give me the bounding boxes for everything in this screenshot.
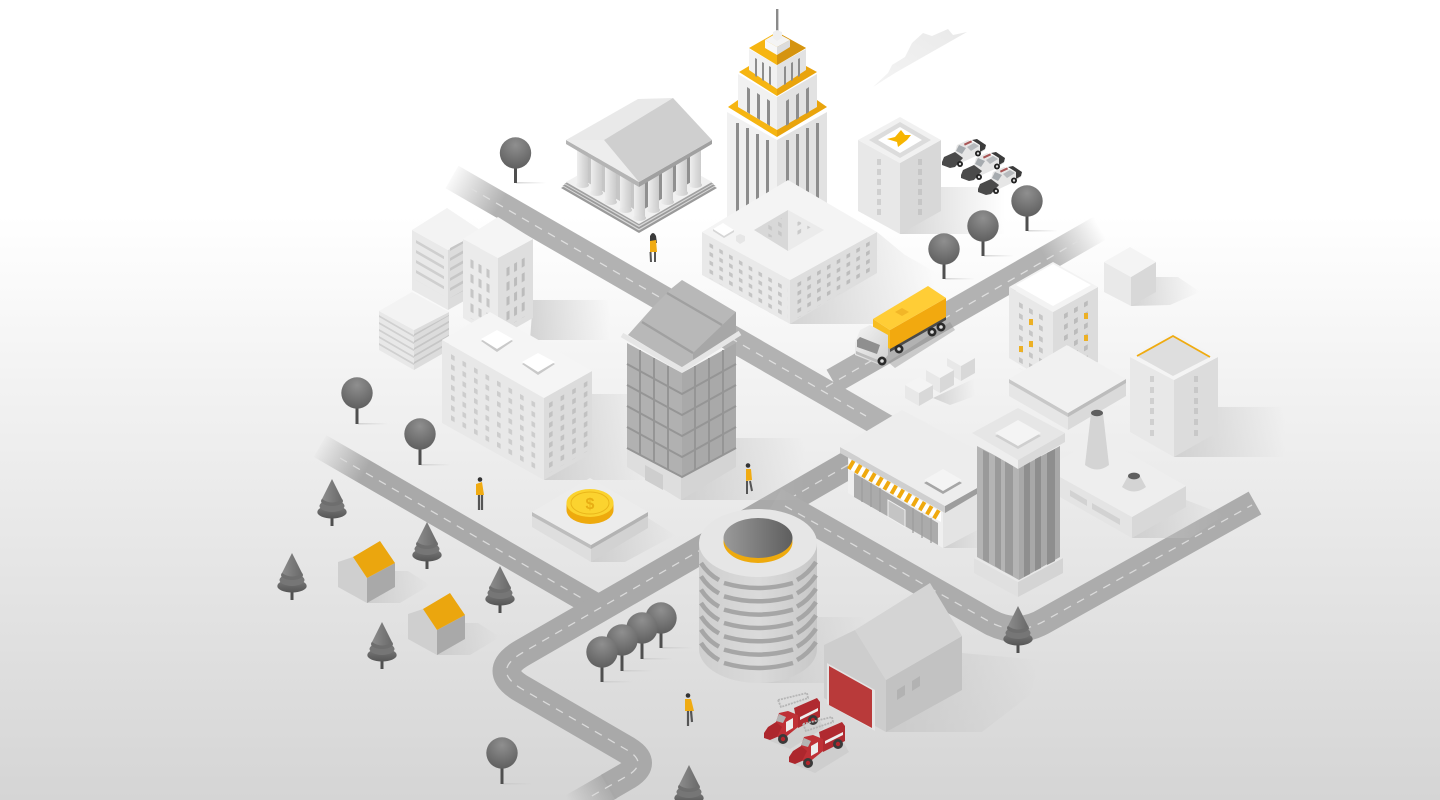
tower gold ledge middle [739, 66, 817, 96]
shop awning [849, 459, 941, 522]
tower gold crown [749, 32, 806, 65]
houses [338, 541, 465, 655]
icon: gold star [887, 130, 911, 147]
tall window block [463, 217, 533, 338]
person: man on left street [476, 477, 484, 510]
pine trees [277, 479, 1033, 800]
road: winding street [506, 458, 860, 800]
glass tower roof [622, 280, 740, 370]
building with yellow rim [1130, 332, 1218, 457]
shop front wall [848, 457, 977, 548]
tree trunks [356, 160, 1028, 784]
fire station red door [827, 663, 875, 731]
truck [855, 286, 955, 368]
cubes [905, 350, 975, 406]
tower cap [765, 30, 790, 55]
round trees [341, 137, 1058, 785]
cube 1 [905, 377, 933, 406]
truck cab [855, 325, 888, 366]
house 1 [338, 541, 395, 603]
antenna [776, 9, 778, 35]
courtyard building windows [710, 243, 788, 323]
factory chimney [1085, 410, 1109, 470]
cloud [873, 29, 967, 87]
house 2 [408, 593, 465, 655]
truck shadow [888, 322, 955, 368]
police building windows [877, 159, 922, 215]
garage floors [701, 562, 816, 668]
tower gold ledge lower [728, 100, 827, 137]
slab roof hatches [481, 330, 555, 375]
tower middle section [738, 74, 817, 130]
tower lower section [727, 112, 827, 225]
police building [858, 117, 941, 234]
bank steps [561, 141, 717, 233]
factory windows [1070, 490, 1120, 525]
shop [840, 410, 977, 548]
person: woman near bank [650, 233, 657, 262]
slab building [442, 312, 592, 480]
courtyard well [754, 210, 824, 251]
stacked low block [379, 292, 449, 370]
courtyard building [702, 180, 877, 324]
truck cargo box [873, 286, 946, 349]
factory vent [1122, 473, 1146, 492]
ground shadows [367, 187, 1285, 732]
shop roof [840, 410, 977, 513]
garage well [724, 518, 792, 563]
cube 3 [947, 350, 975, 381]
striped tower [972, 408, 1065, 597]
flat building [1009, 345, 1126, 430]
road: truck street [826, 228, 1100, 387]
shop door [888, 500, 905, 527]
police cars [942, 139, 1022, 195]
roof hatches [713, 223, 745, 244]
striped tower cap [972, 408, 1065, 469]
coin pedestal [532, 478, 648, 562]
person: man near glass tower [746, 463, 752, 494]
fire trucks [764, 693, 849, 773]
factory [1060, 410, 1186, 538]
cube 2 [926, 362, 954, 393]
road network [320, 177, 1255, 800]
fire station windows [897, 676, 920, 700]
person: man near fire trucks [685, 693, 694, 726]
skyscraper [727, 9, 827, 225]
truck chassis and wheels [890, 315, 946, 354]
striped tower base [974, 534, 1063, 597]
road: east curve [775, 500, 1255, 629]
tree crowns [341, 137, 1043, 769]
small cube building [1104, 247, 1156, 306]
building with yellow windows [1009, 262, 1098, 385]
coin: $ [586, 496, 595, 513]
parking garage [699, 509, 817, 683]
lit windows [1019, 313, 1088, 352]
bank inner wall [578, 150, 700, 212]
rim building windows [1150, 376, 1198, 436]
tall striped block [412, 208, 480, 310]
bank columns [576, 150, 702, 221]
glass tower base [627, 448, 736, 500]
glass tower facade [627, 343, 736, 477]
tower top section [749, 49, 806, 89]
glass tower [622, 280, 740, 500]
bank roof [566, 98, 712, 187]
fire station [824, 583, 962, 732]
tree shadows [358, 182, 1058, 784]
road: upper avenue [452, 177, 890, 430]
road: lower left street [320, 446, 600, 608]
bank [561, 98, 717, 233]
striped tower body [977, 446, 1060, 580]
